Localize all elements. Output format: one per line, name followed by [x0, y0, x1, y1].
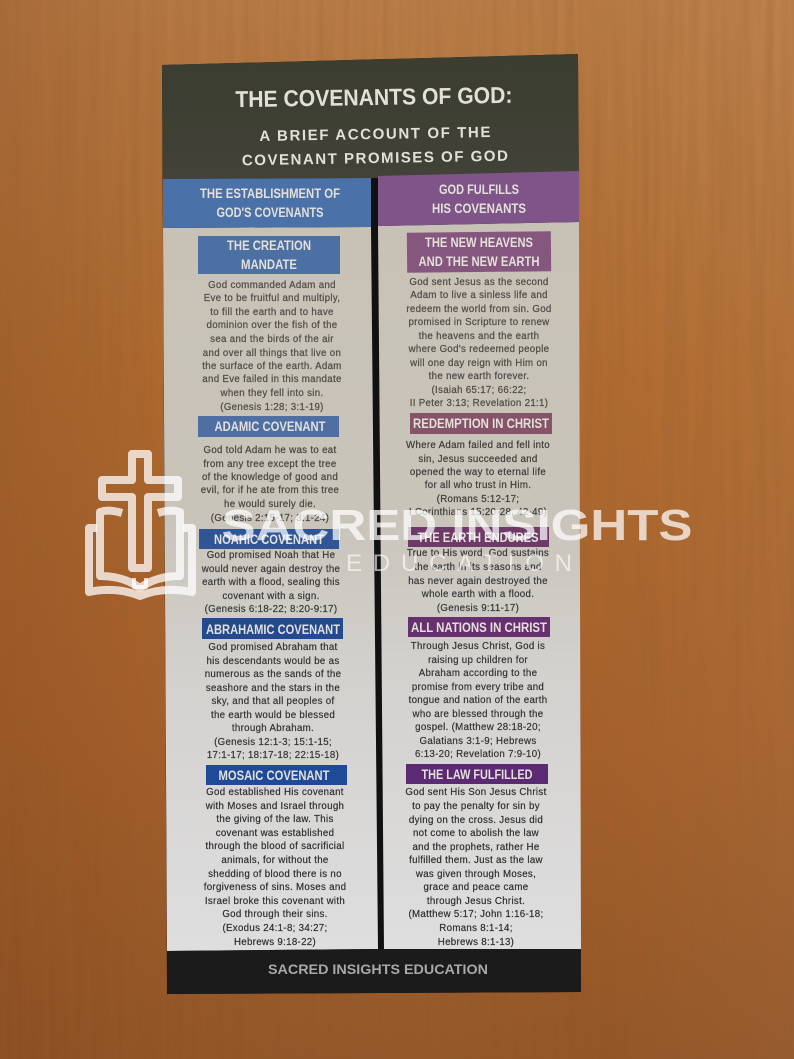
section: noahic covenant: earth with a flood, sealing this: [202, 577, 340, 588]
section: the new heavens and the new earth: the heavens and the earth: [419, 331, 539, 342]
section: the earth endures: (Genesis 9:11-17): [437, 603, 519, 614]
icon: cross and open book: [89, 454, 192, 596]
section: adamic covenant: [198, 416, 339, 524]
section: all nations in christ: ALL NATIONS IN CHRIST: [411, 620, 548, 635]
section: the new heavens and the new earth: Adam to live a sinless life and: [410, 290, 548, 301]
section: all nations in christ: gospel. (Matthew 28:18-20;: [415, 722, 541, 733]
section: all nations in christ: [408, 617, 550, 760]
section: mosaic covenant: covenant was established: [216, 828, 334, 839]
section: abrahamic covenant: the earth would be blessed: [211, 710, 335, 721]
section: the new heavens and the new earth: redeem the world from sin. God: [406, 304, 552, 315]
section: mosaic covenant: [204, 765, 347, 948]
section: all nations in christ: who are blessed through the: [412, 709, 543, 720]
section: redemption in christ: sin, Jesus succeeded and: [418, 454, 538, 465]
section: adamic covenant: of the knowledge of good and: [202, 472, 338, 483]
section: abrahamic covenant: sky, and that all peoples of: [212, 696, 334, 707]
section: the creation mandate: to fill the earth and to have: [210, 307, 334, 318]
section: the creation mandate: (Genesis 1:28; 3:1-19): [220, 402, 324, 413]
section: noahic covenant: covenant with a sign.: [222, 591, 320, 602]
section: the law fulfilled: (Matthew 5:17; John 1:16-18;: [409, 909, 543, 920]
section: the law fulfilled: to pay the penalty for sin by: [412, 801, 540, 812]
section: noahic covenant: God promised Noah that He: [207, 550, 335, 561]
left column header: THE ESTABLISHMENT OF: [200, 186, 340, 201]
section: the law fulfilled: not come to abolish the law: [413, 828, 540, 839]
section: the new heavens and the new earth: where God's redeemed people: [408, 344, 549, 355]
section: abrahamic covenant: ABRAHAMIC COVENANT: [206, 622, 341, 637]
section: noahic covenant: [199, 529, 340, 615]
header panel: [162, 54, 579, 179]
section: redemption in christ: REDEMPTION IN CHRIST: [413, 416, 550, 431]
section: redemption in christ: opened the way to eternal life: [410, 467, 546, 478]
card base: [162, 54, 581, 994]
right column header: [378, 171, 579, 226]
section: mosaic covenant: animals, for without the: [221, 855, 329, 866]
section: the creation mandate: THE CREATION: [227, 238, 311, 253]
section: the law fulfilled: THE LAW FULFILLED: [422, 767, 533, 782]
section: abrahamic covenant: through Abraham.: [232, 723, 314, 734]
section: the creation mandate: and Eve failed in this mandate: [202, 374, 342, 385]
section: abrahamic covenant: numerous as the sands of the: [205, 669, 341, 680]
section: all nations in christ: raising up children for: [428, 655, 528, 666]
section: the new heavens and the new earth: [406, 231, 552, 409]
watermark: [89, 454, 692, 596]
section: mosaic covenant: Hebrews 9:18-22): [234, 937, 316, 948]
section: all nations in christ: promise from every tribe and: [412, 682, 544, 693]
section: the earth endures: True to His word, God sustains: [407, 548, 549, 559]
section: mosaic covenant: Israel broke this covenant with: [205, 896, 345, 907]
right column panel: [378, 222, 581, 949]
section: mosaic covenant: shedding of blood there is no: [208, 869, 342, 880]
section: mosaic covenant: forgiveness of sins. Moses and: [204, 882, 346, 893]
subtitle: COVENANT PROMISES OF GOD: [242, 148, 508, 169]
section: noahic covenant: NOAHIC COVENANT: [214, 532, 325, 547]
section: the creation mandate: and over all things that live on: [203, 348, 341, 359]
section: noahic covenant: (Genesis 6:18-22; 8:20-9:17): [205, 604, 337, 615]
section: the new heavens and the new earth: will one day reign with Him on: [409, 358, 548, 369]
section: the law fulfilled: God sent His Son Jesus Christ: [405, 787, 547, 798]
section: the law fulfilled: Romans 8:1-14;: [439, 923, 513, 934]
section: abrahamic covenant: [202, 618, 343, 761]
section: abrahamic covenant: 17:1-17; 18:17-18; 22:15-18): [207, 750, 339, 761]
section: the law fulfilled: and the prophets, rather He: [412, 842, 540, 853]
section: the creation mandate: sea and the birds of the air: [210, 334, 334, 345]
footer bar: SACRED INSIGHTS EDUCATION: [268, 961, 488, 977]
section: the earth endures: has never again destroyed the: [408, 576, 548, 587]
section: the new heavens and the new earth: THE NEW HEAVENS: [425, 235, 533, 250]
section: the law fulfilled: fulfilled them. Just as the law: [409, 855, 544, 866]
section: the law fulfilled: through Jesus Christ.: [427, 896, 525, 907]
section: the creation mandate: MANDATE: [241, 257, 297, 272]
section: the earth endures: [407, 527, 549, 614]
section: the creation mandate: Eve to be fruitful and multiply,: [204, 293, 340, 304]
section: the new heavens and the new earth: (Isaiah 65:17; 66:22;: [431, 385, 527, 396]
section: all nations in christ: Abraham according to the: [419, 668, 537, 679]
section: redemption in christ: I Corinthians 15:20-28, 42-49): [409, 507, 547, 518]
section: mosaic covenant: with Moses and Israel through: [205, 801, 344, 812]
section: redemption in christ: (Romans 5:12-17;: [437, 494, 519, 505]
section: the law fulfilled: Hebrews 8:1-13): [438, 937, 514, 948]
right column header: HIS COVENANTS: [432, 201, 526, 216]
section: abrahamic covenant: God promised Abraham that: [208, 642, 338, 653]
section: the creation mandate: God commanded Adam and: [208, 280, 336, 291]
right column header: GOD FULFILLS: [439, 182, 519, 197]
section: adamic covenant: evil, for if he ate from this tree: [201, 485, 339, 496]
section: adamic covenant: ADAMIC COVENANT: [214, 419, 326, 434]
left column panel: [163, 227, 378, 951]
section: the law fulfilled: grace and peace came: [424, 882, 528, 893]
section: mosaic covenant: God through their sins.: [222, 909, 328, 920]
section: adamic covenant: (Genesis 2:15-17; 3:1-24): [211, 513, 329, 524]
section: mosaic covenant: through the blood of sacrificial: [206, 841, 344, 852]
section: the earth endures: the earth in its seasons and: [414, 562, 542, 573]
section: noahic covenant: would never again destroy the: [201, 564, 340, 575]
footer bar: [167, 949, 581, 994]
section: redemption in christ: [406, 413, 552, 518]
section: adamic covenant: he would surely die.: [224, 499, 316, 510]
section: the new heavens and the new earth: II Peter 3:13; Revelation 21:1): [410, 398, 548, 409]
section: the new heavens and the new earth: God sent Jesus as the second: [409, 277, 549, 288]
title: THE COVENANTS OF GOD:: [235, 82, 513, 112]
section: the law fulfilled: [405, 764, 548, 948]
section: mosaic covenant: the giving of the law. This: [216, 814, 334, 825]
section: all nations in christ: tongue and nation of the earth: [409, 695, 547, 706]
subtitle: [242, 124, 508, 169]
bookmark card: [162, 54, 581, 994]
section: mosaic covenant: God established His covenant: [206, 787, 344, 798]
section: redemption in christ: Where Adam failed and fell into: [406, 440, 550, 451]
section: the new heavens and the new earth: promised in Scripture to renew: [409, 317, 550, 328]
section: the law fulfilled: was given through Moses,: [415, 869, 536, 880]
section: redemption in christ: for all who trust in Him.: [425, 480, 531, 491]
section: mosaic covenant: MOSAIC COVENANT: [218, 768, 330, 783]
section: all nations in christ: Galatians 3:1-9; Hebrews: [420, 736, 536, 747]
section: all nations in christ: Through Jesus Christ, God is: [411, 641, 545, 652]
section: the new heavens and the new earth: the new earth forever.: [429, 371, 529, 382]
section: the law fulfilled: dying on the cross. Jesus did: [409, 815, 543, 826]
section: the creation mandate: the surface of the earth. Adam: [202, 361, 342, 372]
section: the creation mandate: dominion over the fish of the: [207, 320, 337, 331]
section: adamic covenant: God told Adam he was to eat: [203, 445, 337, 456]
watermark subtitle: EDUCATION: [346, 550, 572, 577]
section: the creation mandate: [198, 236, 342, 413]
watermark name: SACRED INSIGHTS: [222, 501, 692, 550]
section: the earth endures: whole earth with a flood.: [421, 589, 534, 600]
left column header: GOD'S COVENANTS: [216, 205, 324, 220]
section: the creation mandate: when they fell into sin.: [220, 388, 324, 399]
section: the earth endures: THE EARTH ENDURES: [418, 530, 538, 545]
section: adamic covenant: from any tree except the tree: [203, 459, 337, 470]
section: abrahamic covenant: (Genesis 12:1-3; 15:1-15;: [214, 737, 332, 748]
section: abrahamic covenant: his descendants would be as: [206, 656, 340, 667]
section: the new heavens and the new earth: AND THE NEW EARTH: [418, 254, 540, 269]
subtitle: A BRIEF ACCOUNT OF THE: [259, 124, 491, 145]
section: mosaic covenant: (Exodus 24:1-8; 34:27;: [222, 923, 328, 934]
section: all nations in christ: 6:13-20; Revelation 7:9-10): [415, 749, 541, 760]
section: abrahamic covenant: seashore and the stars in the: [206, 683, 340, 694]
left column header: [163, 178, 371, 228]
